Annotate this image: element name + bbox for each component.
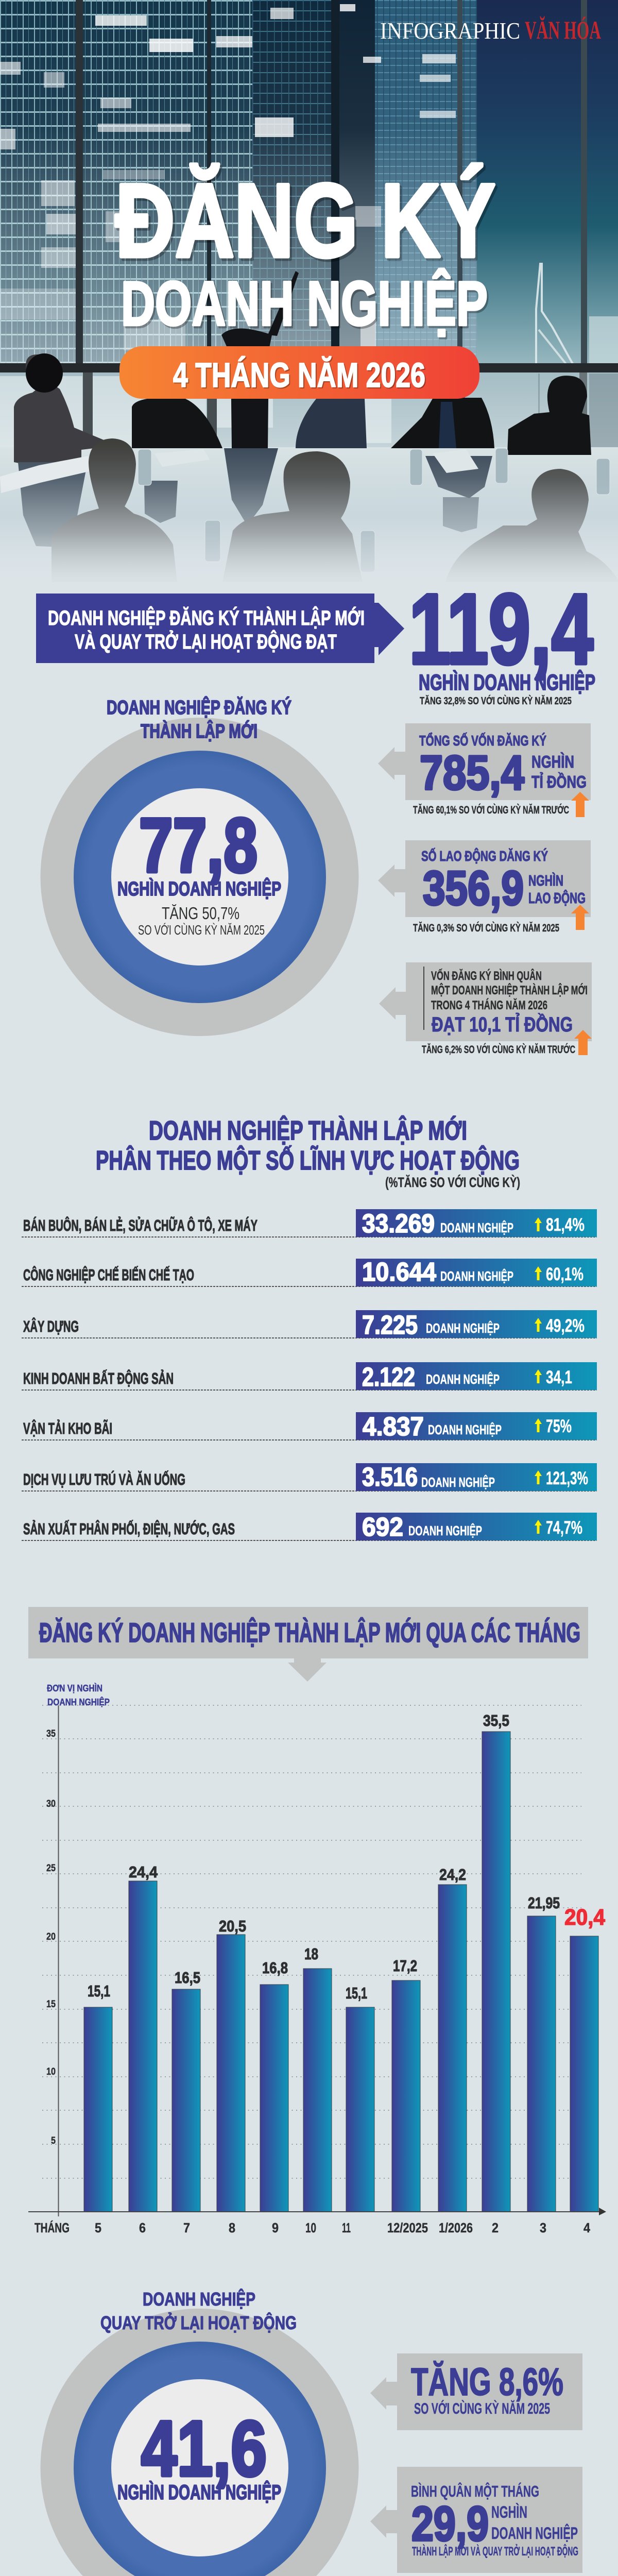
panel: registered capital — [378, 723, 591, 817]
bar values: 16,5 — [175, 1969, 200, 1987]
panel: average capital: TRONG 4 THÁNG NĂM 2026 — [431, 998, 547, 1012]
panel: registered workers: NGHÌN — [528, 872, 563, 889]
panel: monthly average — [370, 2467, 582, 2573]
panel: new enterprises donut: 77,8 — [139, 802, 258, 888]
table reflections and documents — [0, 448, 610, 572]
y axis ticks: 30 — [46, 1799, 56, 1809]
y axis ticks: 15 — [46, 1999, 56, 2010]
month labels: 1/2026 — [439, 2220, 473, 2235]
headline banner with arrow: DOANH NGHIỆP ĐĂNG KÝ THÀNH LẬP MỚI — [48, 606, 365, 630]
panel: returning growth: TĂNG 8,6% — [411, 2360, 563, 2403]
panel: new enterprises donut: NGHÌN DOANH NGHIỆP — [117, 877, 281, 900]
month labels: 9 — [272, 2220, 279, 2235]
panel: new enterprises donut: THÀNH LẬP MỚI — [141, 720, 258, 742]
bar values: 18 — [304, 1945, 318, 1963]
title: ĐĂNG KÝ — [117, 165, 497, 282]
sector row: manufacturing: 60,1% — [546, 1264, 583, 1284]
section heading: by sector: (%TĂNG SO VỚI CÙNG KỲ) — [385, 1174, 520, 1190]
sector row: transport and storage — [22, 1412, 597, 1441]
sector row: construction: DOANH NGHIỆP — [426, 1320, 500, 1336]
sector row: accommodation and catering: 3.516 — [362, 1462, 418, 1492]
month labels: 2 — [492, 2220, 499, 2235]
sector row: transport and storage: DOANH NGHIỆP — [428, 1422, 502, 1437]
bottom fade into page colour — [0, 479, 618, 587]
hero photo: boardroom silhouettes against city towers — [0, 0, 618, 587]
month labels: 3 — [540, 2220, 546, 2235]
foreground attendees seen from behind — [52, 438, 618, 582]
bar values: 35,5 — [483, 1711, 509, 1730]
y axis unit: ĐƠN VỊ NGHÌN — [47, 1683, 102, 1693]
period pill: 4 THÁNG NĂM 2026 — [174, 357, 426, 396]
title: DOANH NGHIỆP — [123, 270, 489, 341]
panel: registered workers: 356,9 — [423, 861, 524, 915]
brand logo top: INFOGRAPHIC — [380, 18, 520, 44]
month labels: 5 — [95, 2220, 101, 2235]
panel: registered workers — [378, 840, 591, 934]
panel: returning enterprises donut: 41,6 — [141, 2405, 267, 2493]
title — [115, 162, 497, 341]
panel: monthly average: DOANH NGHIỆP — [491, 2524, 578, 2543]
section heading: by sector: DOANH NGHIỆP THÀNH LẬP MỚI — [149, 1115, 467, 1146]
y axis ticks: 25 — [46, 1863, 56, 1874]
y axis unit: DOANH NGHIỆP — [47, 1697, 110, 1707]
section heading: by sector — [96, 1115, 520, 1190]
sector row: accommodation and catering — [22, 1462, 597, 1492]
title: DOANH NGHIỆP — [121, 268, 488, 338]
panel: new enterprises donut: TĂNG 50,7% — [162, 904, 239, 923]
title: ĐĂNG KÝ — [115, 162, 495, 279]
sector row: construction: XÂY DỰNG — [23, 1317, 79, 1335]
axes — [28, 1705, 606, 2216]
panel: average capital — [379, 962, 592, 1056]
headline banner with arrow: VÀ QUAY TRỞ LẠI HOẠT ĐỘNG ĐẠT — [75, 630, 337, 653]
y axis ticks — [46, 1728, 56, 2146]
month labels: 11 — [342, 2220, 351, 2235]
period pill — [119, 346, 479, 399]
bar values: 24,2 — [439, 1866, 466, 1884]
bar values: 17,2 — [393, 1957, 417, 1975]
month labels: 6 — [139, 2220, 146, 2235]
meeting attendees behind the table — [14, 271, 591, 476]
panel: returning growth — [370, 2353, 582, 2430]
panel: average capital: VỐN ĐĂNG KÝ BÌNH QUÂN — [431, 969, 542, 983]
panel: registered workers: SỐ LAO ĐỘNG DĂNG KÝ — [421, 848, 548, 864]
sector row: construction: 49,2% — [546, 1316, 585, 1336]
sector row: real estate — [22, 1362, 597, 1392]
sector row: manufacturing — [22, 1257, 597, 1286]
panel: monthly average: BÌNH QUÂN MỘT THÁNG — [411, 2482, 539, 2500]
sector row: construction: 7.225 — [362, 1310, 418, 1340]
panel: registered capital: TỈ ĐỒNG — [531, 772, 587, 791]
sector row: real estate: KINH DOANH BẤT ĐỘNG SẢN — [23, 1369, 174, 1387]
total figure 119,4 — [409, 573, 595, 707]
sector row: manufacturing: DOANH NGHIỆP — [440, 1268, 513, 1284]
bar values: 20,4 — [564, 1905, 605, 1930]
sector row: power water gas: SẢN XUẤT PHÂN PHỐI, ĐIỆN, NƯỚC, GAS — [23, 1519, 235, 1538]
sector row: real estate: DOANH NGHIỆP — [426, 1371, 500, 1387]
month labels — [35, 2220, 590, 2235]
sector row: wholesale and retail: BÁN BUÔN, BÁN LẺ, SỬA CHỮA Ô TÔ, XE MÁY — [23, 1216, 258, 1234]
bar chart: monthly new enterprises — [28, 1683, 606, 2235]
bar values — [88, 1711, 605, 2002]
sector row: wholesale and retail: DOANH NGHIỆP — [440, 1220, 513, 1235]
month labels: 7 — [183, 2220, 190, 2235]
sector row: wholesale and retail: 33.269 — [362, 1209, 435, 1238]
sector row: accommodation and catering: 121,3% — [546, 1468, 588, 1488]
panel: monthly average: NGHÌN — [491, 2503, 527, 2521]
panel: registered capital: TỔNG SỐ VỐN ĐĂNG KÝ — [419, 732, 546, 749]
panel: average capital: ĐẠT 10,1 TỈ ĐỒNG — [432, 1012, 573, 1036]
panel: registered capital: 785,4 — [420, 745, 524, 800]
headline banner with arrow — [36, 594, 404, 663]
sector row: transport and storage: 4.837 — [363, 1412, 424, 1441]
sector row: power water gas: DOANH NGHIỆP — [408, 1523, 482, 1538]
panel: monthly average: 29,9 — [411, 2497, 489, 2551]
section banner: monthly registrations — [28, 1607, 588, 1682]
brand logo top — [380, 15, 601, 44]
sector row: power water gas: 74,7% — [546, 1518, 582, 1538]
y axis ticks: 5 — [51, 2136, 56, 2146]
panel: new enterprises donut — [40, 696, 358, 1036]
panel: returning enterprises donut: DOANH NGHIỆP — [143, 2288, 255, 2310]
month labels: 8 — [229, 2220, 235, 2235]
y axis ticks: 20 — [46, 1931, 56, 1942]
sector row: real estate: 2.122 — [362, 1362, 415, 1392]
month labels: 10 — [305, 2220, 316, 2235]
sector row: power water gas — [22, 1512, 597, 1541]
sector row: manufacturing: CÔNG NGHIỆP CHẾ BIẾN CHẾ TẠO — [23, 1265, 194, 1284]
sector row: transport and storage: VẬN TẢI KHO BÃI — [23, 1419, 112, 1437]
bar values: 24,4 — [129, 1863, 158, 1881]
sector row: manufacturing: 10.644 — [362, 1257, 437, 1286]
sector row: wholesale and retail: 81,4% — [546, 1215, 585, 1235]
period pill: 4 THÁNG NĂM 2026 — [173, 356, 425, 395]
panel: registered workers: LAO ĐỘNG — [528, 889, 586, 907]
bars — [84, 1732, 598, 2212]
panel: new enterprises donut: DOANH NGHIỆP ĐĂNG KÝ — [107, 696, 291, 719]
sector row: accommodation and catering: DOANH NGHIỆP — [421, 1475, 495, 1490]
panel: new enterprises donut: SO VỚI CÙNG KỲ NĂM 2025 — [138, 922, 265, 938]
bar values: 15,1 — [346, 1984, 367, 2002]
sector row: transport and storage: 75% — [546, 1416, 572, 1436]
panel: registered workers: TĂNG 0,3% SO VỚI CÙNG KỲ NĂM 2025 — [413, 922, 559, 934]
month labels: THÁNG — [35, 2220, 70, 2235]
panel: returning growth: SO VỚI CÙNG KỲ NĂM 2025 — [414, 2400, 550, 2417]
panel: returning enterprises donut: QUAY TRỞ LẠI HOẠT ĐỘNG — [100, 2312, 297, 2333]
y axis ticks: 35 — [46, 1728, 56, 1739]
panel: returning enterprises donut: NGHÌN DOANH NGHIỆP — [117, 2480, 281, 2504]
bar values: 16,8 — [262, 1959, 288, 1977]
bar values: 21,95 — [528, 1894, 560, 1912]
month labels: 12/2025 — [387, 2220, 428, 2235]
bar values: 20,5 — [219, 1917, 246, 1935]
y axis unit — [47, 1683, 110, 1707]
sector row: construction — [22, 1310, 597, 1340]
month labels: 4 — [583, 2220, 590, 2235]
y axis ticks: 10 — [46, 2066, 56, 2077]
panel: registered capital: NGHÌN — [531, 752, 574, 771]
sector row: wholesale and retail — [22, 1209, 597, 1238]
bar values: 15,1 — [88, 1982, 110, 2000]
panel: returning enterprises donut — [40, 2288, 358, 2576]
total figure 119,4: TĂNG 32,8% SO VỚI CÙNG KỲ NĂM 2025 — [420, 694, 572, 707]
sector row: real estate: 34,1 — [546, 1367, 572, 1387]
sector row: power water gas: 692 — [362, 1512, 403, 1541]
sector row: accommodation and catering: DỊCH VỤ LƯU TRÚ VÀ ĂN UỐNG — [23, 1470, 185, 1488]
